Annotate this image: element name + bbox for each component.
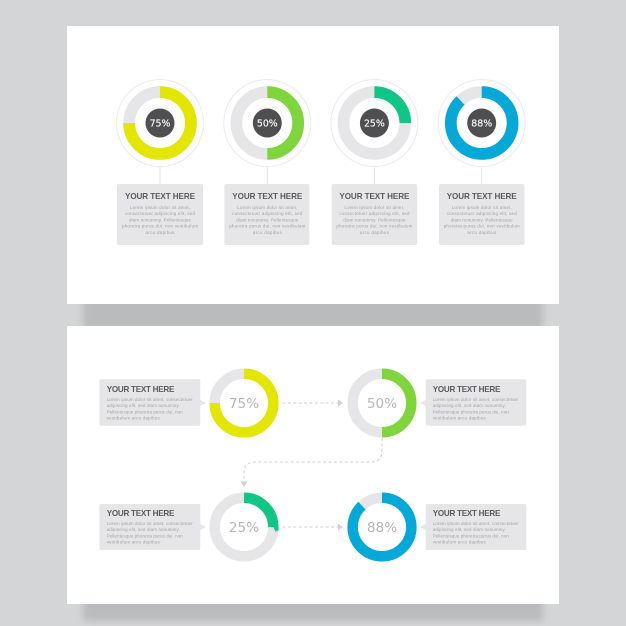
donut: 75% segment — [129, 92, 191, 154]
panel: radial progress cards — [67, 26, 559, 304]
step: 75% — [99, 374, 273, 432]
text box with pointer: Pellentesque phoretra purus dui, non — [107, 533, 183, 538]
value: 50%: 50% — [367, 396, 397, 412]
text box: diam nonummy. Pellentesque — [236, 217, 299, 222]
connector — [374, 167, 375, 184]
text box: arcu dapibus — [467, 230, 497, 235]
badge: 88%: 88% — [471, 119, 492, 130]
text box: consectetuer adipiscing elit, sed — [125, 211, 196, 216]
text box with pointer — [420, 504, 526, 550]
text box: YOUR TEXT HERE — [232, 192, 303, 201]
text box with pointer: YOUR TEXT HERE — [433, 385, 501, 394]
badge: 75% — [146, 108, 174, 138]
donut: 75% segment — [215, 374, 273, 432]
badge: 88% — [467, 108, 496, 138]
value: 25%: 25% — [229, 520, 259, 536]
shadow: top panel — [83, 298, 543, 330]
text box: phoretra purus dui, non vestibulum — [122, 224, 198, 229]
badge: 25%: 25% — [364, 119, 385, 130]
text box — [224, 184, 309, 245]
text box: YOUR TEXT HERE — [447, 192, 517, 201]
step: 88% — [353, 498, 526, 556]
text box: arcu dapibus — [146, 230, 175, 235]
text box: arcu dapibus — [253, 230, 283, 235]
donut: 25% segment — [344, 92, 405, 154]
text box: Lorem ipsum dolor sit amet, — [237, 205, 297, 210]
badge: 50% — [253, 108, 282, 138]
value: 75%: 75% — [229, 396, 259, 412]
text box with pointer: YOUR TEXT HERE — [107, 509, 175, 518]
shadow: bottom panel — [83, 598, 543, 621]
text box with pointer — [420, 379, 526, 426]
text box with pointer: Pellentesque phoretra purus dui, non — [433, 409, 509, 414]
badge: 25% — [360, 108, 389, 138]
text box: consectetuer adipiscing elit, sed — [339, 211, 410, 216]
panel: progress flow — [67, 326, 559, 604]
donut: 88% segment — [353, 498, 411, 556]
donut: 25% segment — [215, 498, 273, 556]
text box with pointer: Pellentesque phoretra purus dui, non — [107, 409, 183, 414]
badge: 75%: 75% — [150, 119, 171, 130]
badge: 50%: 50% — [257, 119, 278, 130]
donut: 88% segment — [451, 92, 513, 154]
text box: phoretra purus dui, non vestibulum — [336, 224, 413, 229]
connector — [160, 167, 161, 184]
connector — [267, 167, 268, 184]
connector — [481, 167, 482, 184]
value: 88%: 88% — [367, 520, 397, 536]
text box — [439, 184, 524, 245]
text box with pointer — [99, 504, 206, 550]
text box with pointer: adipiscing elit, sed diam nonummy. — [433, 527, 506, 532]
text box with pointer: vestibulum arcu dapibus — [107, 540, 160, 545]
text box with pointer: adipiscing elit, sed diam nonummy. — [107, 527, 180, 532]
text box: phoretra purus dui, non vestibulum — [229, 224, 306, 229]
text box with pointer: YOUR TEXT HERE — [107, 385, 175, 394]
card: 88% — [438, 80, 525, 245]
card: 25% — [331, 80, 418, 245]
text box: consectetuer adipiscing elit, sed — [232, 211, 303, 216]
text box: phoretra purus dui, non vestibulum — [444, 224, 520, 229]
text box — [332, 184, 417, 245]
text box with pointer: adipiscing elit, sed diam nonummy. — [107, 403, 180, 408]
text box with pointer: vestibulum arcu dapibus — [433, 416, 486, 421]
text box with pointer: YOUR TEXT HERE — [433, 509, 501, 518]
text box with pointer: Lorem ipsum dolor sit amet, consectetuer — [107, 397, 193, 402]
arrow: 25% to 88% — [282, 524, 343, 530]
text box with pointer: Lorem ipsum dolor sit amet, consectetuer — [433, 397, 519, 402]
text box with pointer: Lorem ipsum dolor sit amet, consectetuer — [433, 521, 519, 526]
arrow: 50% down to 25% — [240, 438, 382, 487]
step: 25% — [99, 498, 273, 556]
text box with pointer: vestibulum arcu dapibus — [107, 416, 160, 421]
text box with pointer — [99, 379, 206, 426]
donut: 50% segment — [353, 374, 411, 432]
text box: arcu dapibus — [360, 230, 390, 235]
text box with pointer: vestibulum arcu dapibus — [433, 540, 486, 545]
text box: YOUR TEXT HERE — [339, 192, 410, 201]
text box: YOUR TEXT HERE — [125, 192, 196, 201]
text box with pointer: Lorem ipsum dolor sit amet, consectetuer — [107, 521, 193, 526]
arrow: 75% to 50% — [282, 400, 343, 406]
text box: Lorem ipsum dolor sit amet, — [130, 205, 190, 210]
text box with pointer: adipiscing elit, sed diam nonummy. — [433, 403, 506, 408]
text box with pointer: Pellentesque phoretra purus dui, non — [433, 533, 509, 538]
text box: consectetuer adipiscing elit, sed — [447, 211, 517, 216]
text box — [117, 184, 203, 245]
donut: 50% segment — [236, 92, 298, 154]
text box: diam nonummy. Pellentesque — [129, 217, 192, 222]
card: 50% — [224, 80, 311, 245]
text box: diam nonummy. Pellentesque — [343, 217, 406, 222]
card: 75% — [116, 80, 204, 245]
step: 50% — [353, 374, 526, 432]
text box: diam nonummy. Pellentesque — [451, 217, 513, 222]
text box: Lorem ipsum dolor sit amet, — [344, 205, 404, 210]
text box: Lorem ipsum dolor sit amet, — [452, 205, 512, 210]
